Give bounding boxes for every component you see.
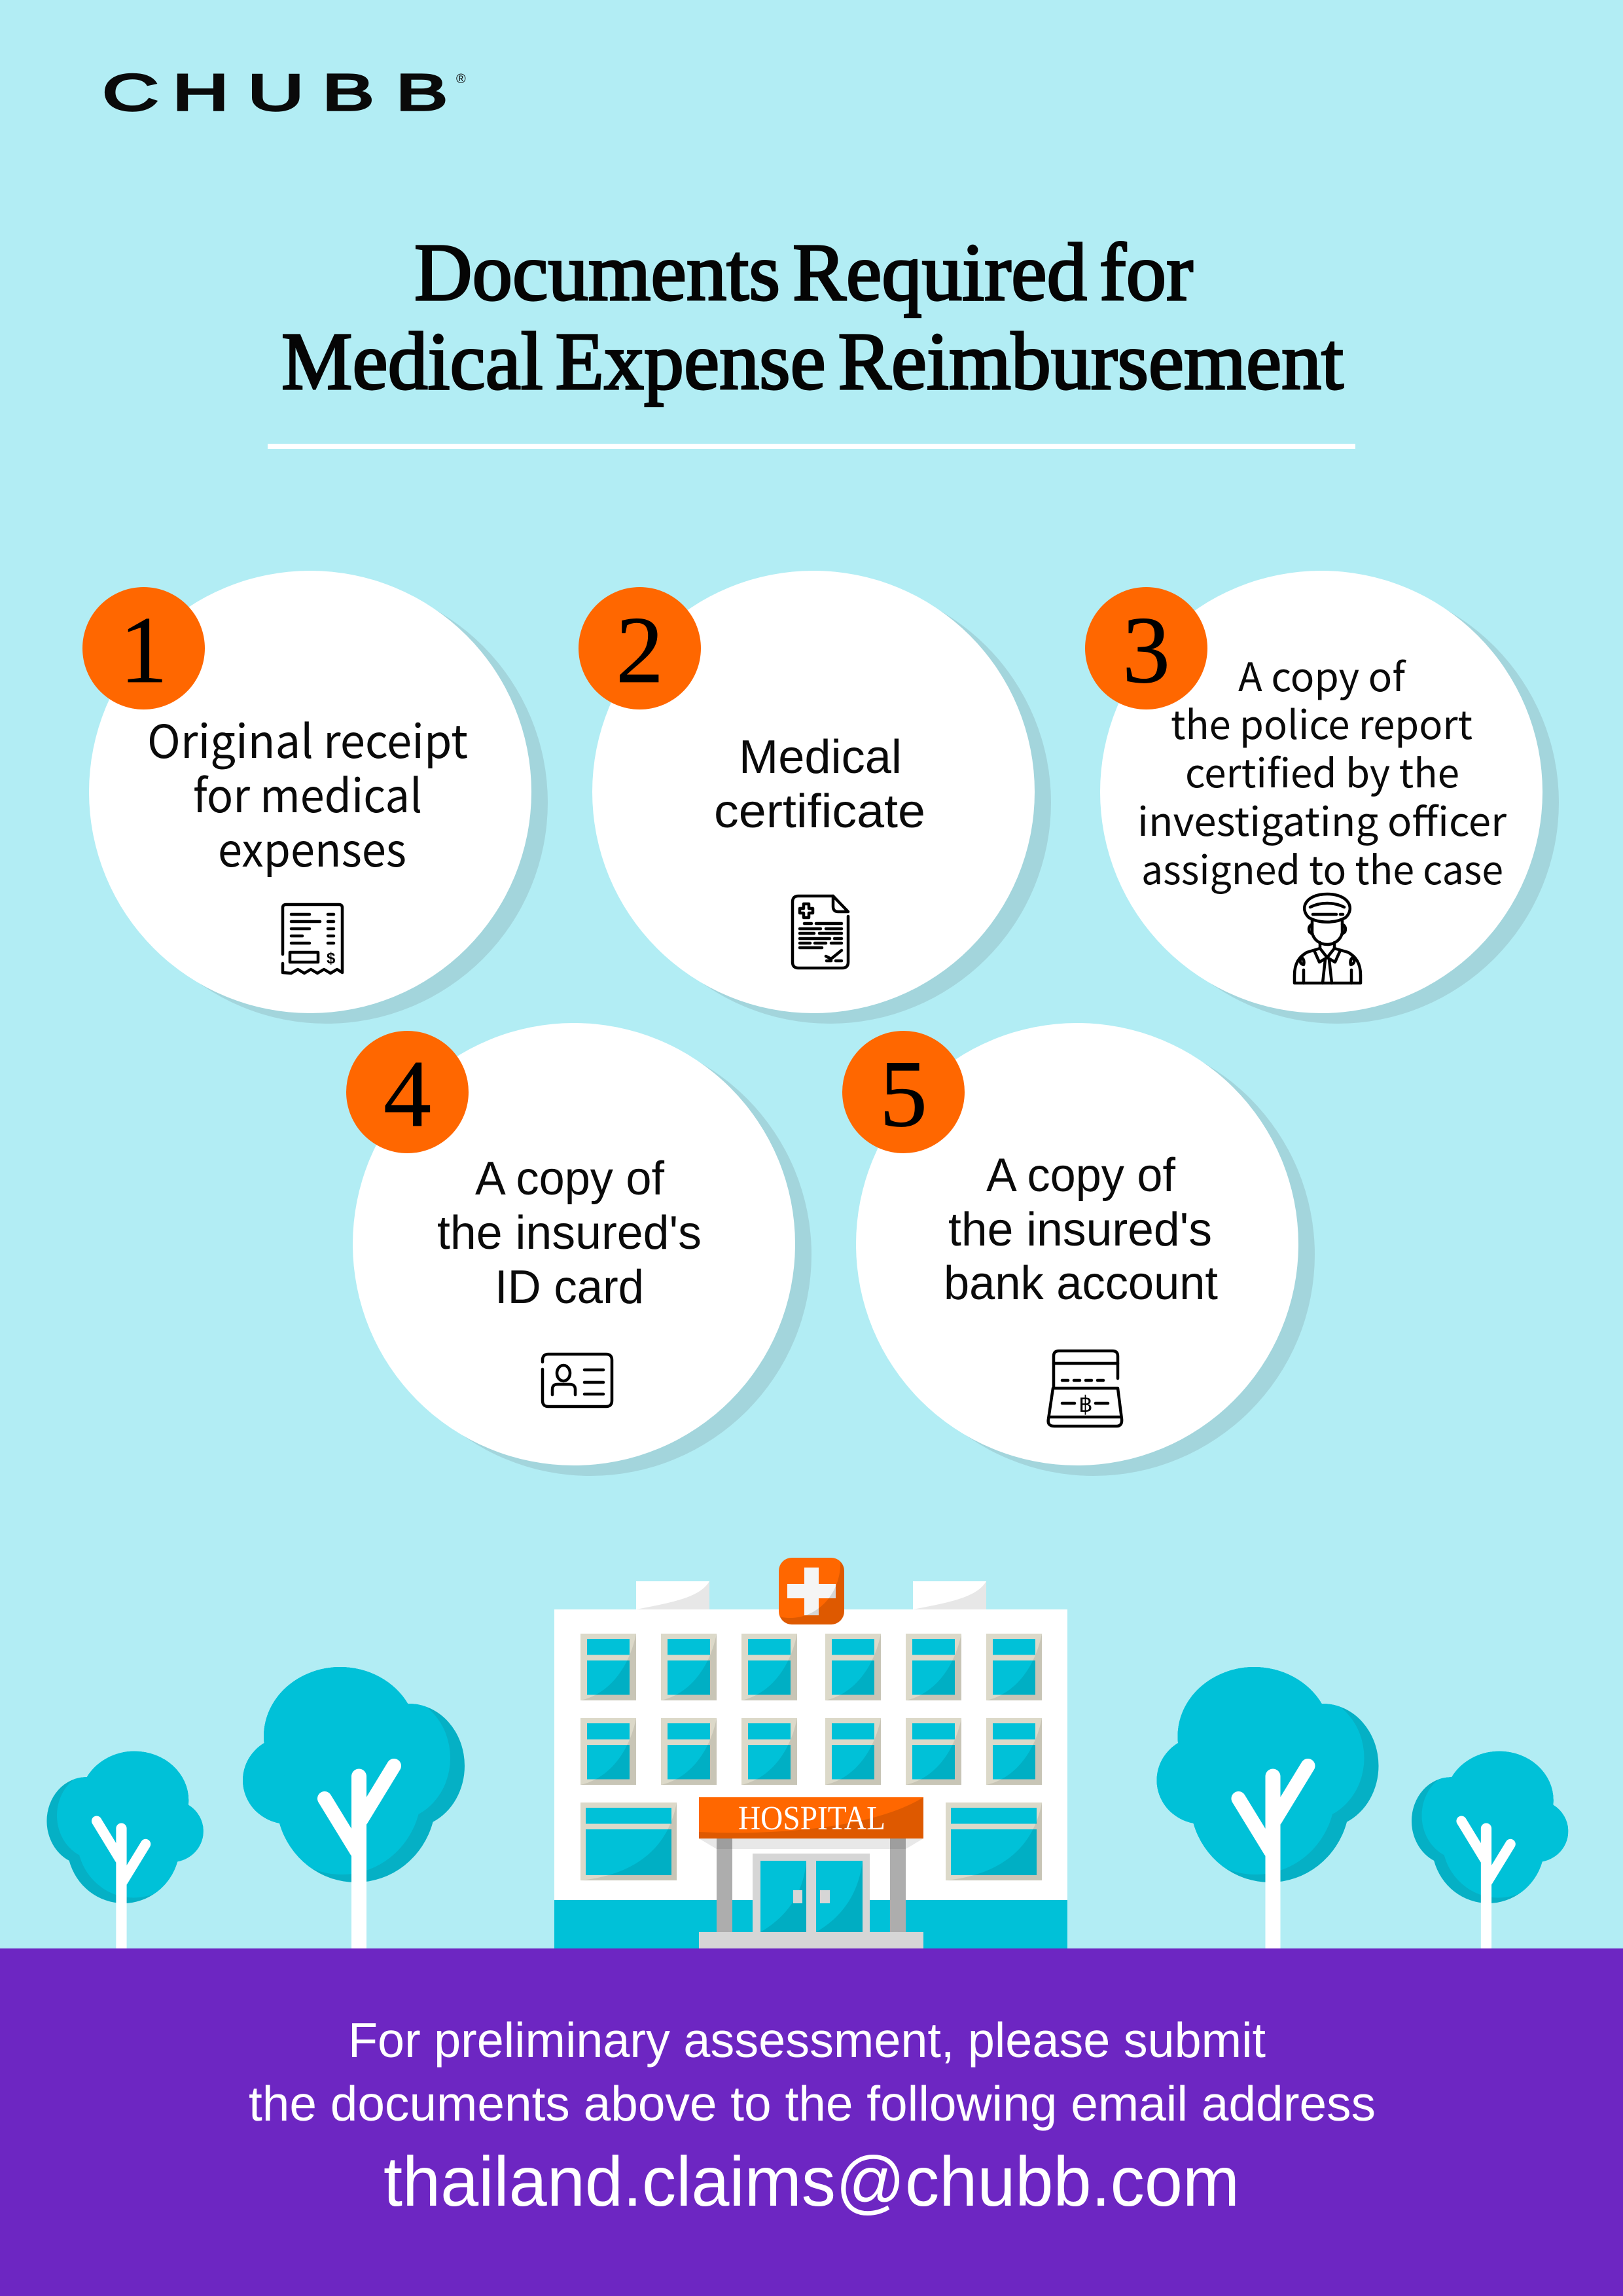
text: item 3: A copy of (1238, 646, 1407, 703)
badge: number 4: 4 (383, 1041, 431, 1147)
icon: police officer (1294, 894, 1361, 983)
badge: number 3: 3 (1122, 597, 1170, 703)
text: item 4: the insured's (437, 1207, 702, 1259)
text: item 5: A copy of (986, 1149, 1176, 1202)
icon: receipt (283, 905, 342, 973)
icon: medical certificate (793, 896, 848, 968)
badge: number 3 (1085, 587, 1207, 709)
icon: medical cross sign (779, 1558, 844, 1624)
panel: item 1 original receipt (82, 571, 548, 1024)
text: item 3: assigned to the case (1141, 839, 1503, 896)
entrance (699, 1839, 923, 1948)
text: item 4 (437, 1153, 702, 1314)
badge: number 5: 5 (880, 1041, 927, 1147)
badge: number 5 (842, 1031, 965, 1153)
icon: ID card (543, 1354, 612, 1407)
title: Medical Expense Reimbursement (281, 317, 1344, 407)
panel: item 3 police report (1085, 571, 1559, 1024)
panel: item 2 medical certificate (579, 571, 1051, 1024)
windows (580, 1634, 1042, 1880)
text: item 2: certificate (714, 785, 925, 838)
badge: number 2: 2 (616, 597, 664, 703)
text: item 3: certified by the (1185, 742, 1459, 799)
text: item 2: Medical (739, 731, 902, 783)
logo: Chubb: ® (456, 72, 466, 86)
roof blocks (636, 1581, 986, 1609)
footer text: For preliminary assessment, please submit (348, 2013, 1266, 2068)
text: item 4: ID card (495, 1261, 644, 1314)
tree: far right small (1402, 1744, 1582, 1965)
text: item 1: for medical (193, 760, 422, 826)
tree: far left small (37, 1744, 218, 1965)
text: item 1: Original receipt (147, 706, 468, 772)
hospital building (554, 1558, 1067, 1948)
text: item 3: investigating officer (1137, 791, 1507, 848)
text: item 5 (944, 1149, 1218, 1310)
text: item 1: expenses (218, 814, 406, 880)
text: item 3: the police report (1171, 694, 1472, 751)
text: item 3 (1137, 646, 1507, 896)
footer text line 2: the documents above to the following email address (249, 2076, 1376, 2131)
footer band (0, 1948, 1623, 2296)
text: item 2 (714, 731, 925, 838)
panel: item 5 bank account (842, 1023, 1315, 1476)
logo: Chubb: CHUBB (103, 64, 448, 121)
text: item 1 (147, 706, 468, 880)
hospital sign: HOSPITAL (738, 1800, 885, 1837)
icon: receipt: $ (327, 950, 336, 967)
email address: thailand.claims@chubb.com (383, 2142, 1240, 2221)
badge: number 2 (579, 587, 701, 709)
badge: number 1: 1 (120, 597, 168, 703)
panel: item 4 ID card (346, 1023, 812, 1476)
badge: number 4 (346, 1031, 469, 1153)
title: Documents Required for (414, 228, 1193, 318)
badge: number 1 (82, 587, 205, 709)
text: item 5: bank account (944, 1257, 1218, 1310)
title (281, 228, 1344, 407)
text: item 5: the insured's (948, 1204, 1212, 1256)
tree: left large (223, 1656, 478, 1970)
hospital sign (699, 1797, 923, 1839)
icon: bank book: ฿ (1079, 1391, 1093, 1418)
text: item 4: A copy of (475, 1153, 665, 1205)
icon: bank book (1048, 1351, 1122, 1426)
tree: right large (1136, 1656, 1391, 1970)
